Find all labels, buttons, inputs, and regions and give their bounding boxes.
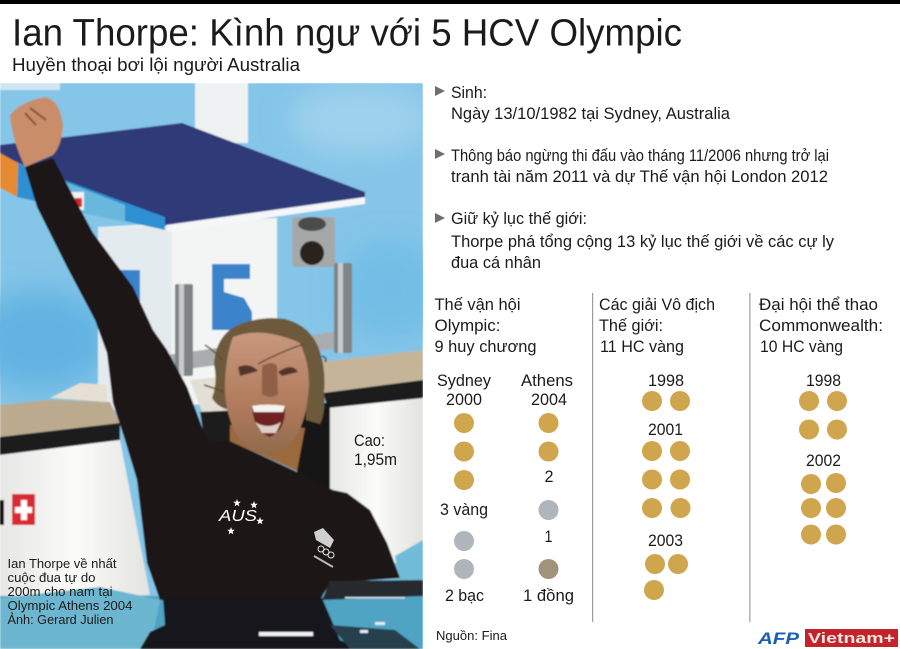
World Championships heading: Các giải Vô địch	[599, 296, 715, 314]
AUS chest logo	[218, 499, 264, 534]
panel: Olympic medals	[434, 296, 574, 605]
1998 medals: 1998	[806, 372, 841, 390]
Olympic heading	[434, 296, 536, 356]
bullet: birth: Ngày 13/10/1982 tại Sydney, Australia	[451, 105, 731, 123]
Olympic heading: 9 huy chương	[434, 338, 536, 356]
panel: Commonwealth Games	[759, 296, 883, 544]
1998 medals	[799, 372, 847, 440]
Olympic heading: Thế vận hội	[434, 296, 520, 314]
starting block	[98, 218, 277, 410]
bullet: retirement: tranh tài năm 2011 và dự Thế vận hội London 2012	[451, 168, 828, 186]
title: Ian Thorpe: Kình ngư với 5 HCV Olympic	[12, 12, 682, 54]
photo caption	[8, 557, 133, 627]
team emblem	[314, 528, 334, 567]
Vietnam+ logo: Vietnam+	[808, 630, 895, 647]
Sydney 2000 medals: 2 bạc	[445, 587, 484, 605]
1998 medals	[642, 372, 690, 411]
photo caption: Ảnh: Gerard Julien	[8, 612, 114, 627]
Commonwealth heading: Đại hội thể thao	[759, 296, 878, 314]
Commonwealth heading	[759, 296, 883, 356]
deck and rails	[0, 400, 120, 437]
fist	[10, 97, 63, 167]
Athens 2004 medals: 2	[544, 468, 554, 486]
Athens 2004 medals: Athens	[521, 372, 573, 390]
Athens 2004 medals: 2004	[531, 391, 567, 409]
hair	[212, 318, 324, 424]
photo caption: Olympic Athens 2004	[8, 599, 133, 613]
AUS chest logo: AUS	[218, 508, 257, 525]
2001 medals	[642, 421, 690, 518]
bullet: world records	[435, 210, 835, 272]
platform	[0, 123, 365, 226]
bullet: retirement: Thông báo ngừng thi đấu vào tháng 11/2006 nhưng trở lại	[451, 147, 829, 165]
subtitle: Huyền thoại bơi lội người Australia	[12, 55, 301, 75]
2003 medals: 2003	[648, 532, 683, 550]
photo caption: Ian Thorpe về nhất	[8, 557, 117, 571]
Vietnam+ logo	[805, 629, 898, 647]
1998 medals: 1998	[648, 372, 684, 390]
World Championships heading	[599, 296, 715, 356]
Olympic heading: Olympic:	[434, 317, 500, 335]
Athens 2004 medals: 1	[544, 528, 552, 546]
bullet: retirement	[435, 147, 829, 186]
2002 medals: 2002	[806, 452, 841, 470]
mouth	[252, 404, 285, 437]
AFP logo: AFP	[757, 629, 800, 648]
height label: Cao:	[354, 432, 385, 450]
2001 medals: 2001	[648, 421, 683, 439]
height label	[354, 432, 397, 469]
top black bar	[0, 0, 900, 4]
Sydney 2000 medals	[437, 372, 492, 605]
bullet: world records: Thorpe phá tổng cộng 13 kỷ lục thế giới về các cự ly	[451, 233, 835, 251]
source: Nguồn: Fina	[436, 629, 507, 643]
sponsor mark	[0, 500, 4, 525]
photo caption: cuộc đua tự do	[8, 571, 96, 585]
photo: Ian Thorpe celebrating in the pool	[0, 83, 440, 649]
Sydney 2000 medals: 3 vàng	[440, 501, 488, 519]
camera	[292, 217, 335, 267]
Commonwealth heading: Commonwealth:	[759, 317, 883, 335]
2003 medals	[644, 532, 688, 600]
Sydney 2000 medals: 2000	[446, 391, 482, 409]
2002 medals	[801, 452, 846, 544]
Commonwealth heading: 10 HC vàng	[760, 338, 843, 356]
reflection in the water	[140, 598, 360, 649]
neck	[230, 425, 305, 471]
Athens 2004 medals	[521, 372, 574, 605]
Athens 2004 medals: 1 đồng	[523, 587, 574, 605]
body	[25, 158, 400, 600]
Sydney 2000 medals: Sydney	[437, 372, 492, 390]
face	[225, 333, 309, 455]
World Championships heading: Thế giới:	[599, 317, 663, 335]
photo caption: 200m cho nam tại	[8, 585, 112, 599]
bullet: birth	[435, 84, 731, 123]
bullet: world records: Giữ kỷ lục thế giới:	[451, 210, 587, 228]
column dividers	[592, 293, 751, 622]
panel: World Championships	[599, 296, 715, 600]
walls	[0, 440, 150, 600]
height label: 1,95m	[354, 451, 397, 469]
water	[0, 596, 423, 649]
World Championships heading: 11 HC vàng	[600, 338, 684, 356]
bullet: world records: đua cá nhân	[451, 254, 541, 272]
bullet: birth: Sinh:	[451, 84, 487, 102]
